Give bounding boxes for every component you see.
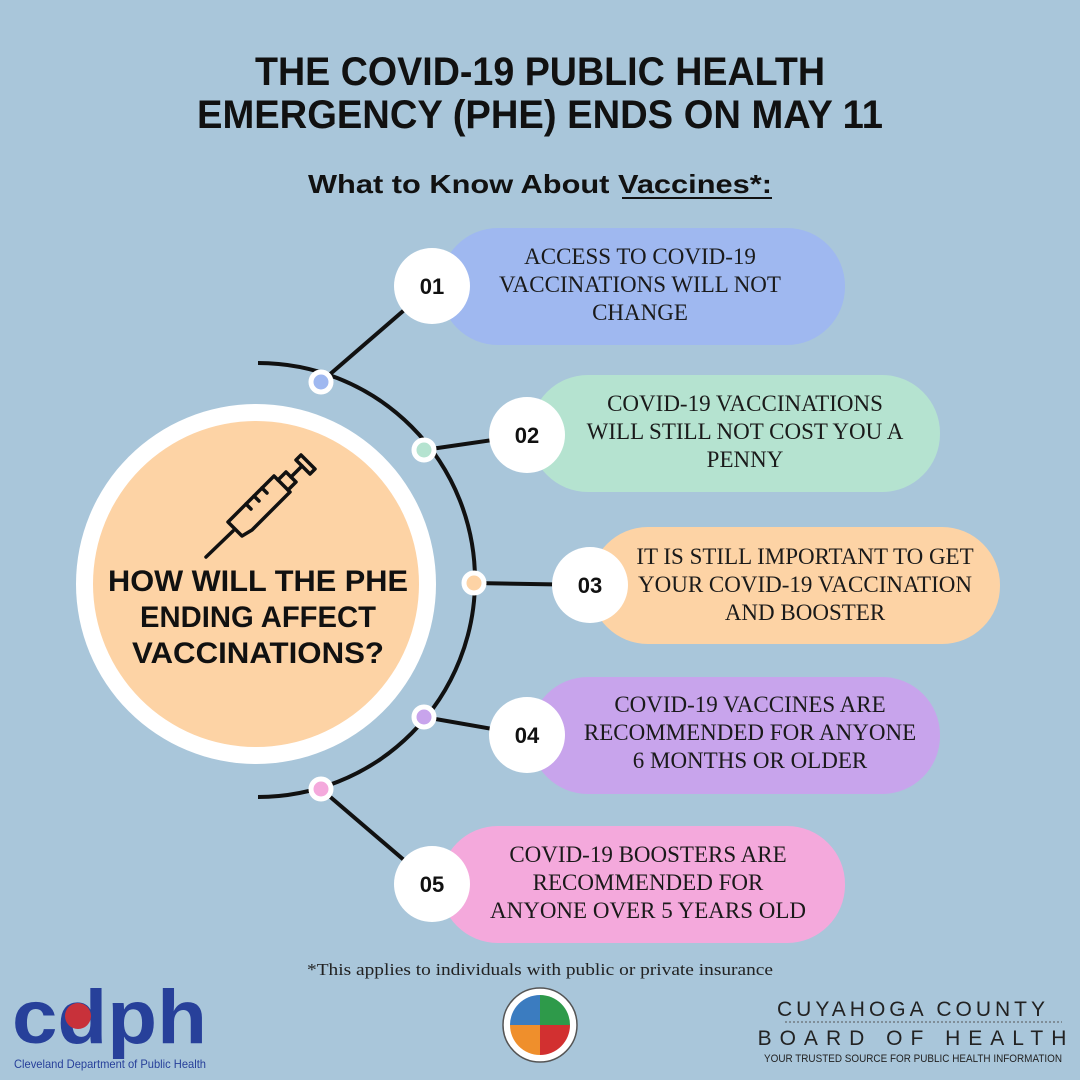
item 03: [552, 527, 1000, 644]
item 05: 05: [420, 872, 444, 897]
item 03: AND BOOSTER: [725, 600, 886, 625]
item 05: RECOMMENDED FOR: [533, 870, 764, 895]
logo: Cuyahoga County Board of Health: BOARD OF HEALTH: [758, 1027, 1074, 1050]
title: THE COVID-19 PUBLIC HEALTH: [255, 50, 825, 94]
central question: ENDING AFFECT: [140, 601, 376, 634]
logo: cdph: cdph: [12, 975, 207, 1060]
item 05: ANYONE OVER 5 YEARS OLD: [490, 898, 806, 923]
item 02: PENNY: [707, 447, 784, 472]
item 04: 04: [515, 723, 540, 748]
connector dots: [311, 372, 484, 799]
item 03: YOUR COVID-19 VACCINATION: [638, 572, 972, 597]
central circle: [76, 404, 436, 764]
item 03: 03: [578, 573, 602, 598]
item 02: COVID-19 VACCINATIONS: [607, 391, 883, 416]
item 01: [394, 228, 845, 345]
item 01: CHANGE: [592, 300, 688, 325]
icon: syringe: [206, 455, 315, 557]
item 04: [489, 677, 940, 794]
subtitle: What to Know About Vaccines*:: [308, 169, 772, 199]
item 02: WILL STILL NOT COST YOU A: [587, 419, 904, 444]
footnote: *This applies to individuals with public or private insurance: [307, 960, 773, 979]
item 05: COVID-19 BOOSTERS ARE: [509, 842, 787, 867]
item 04: COVID-19 VACCINES ARE: [614, 692, 886, 717]
arc connector: [258, 286, 590, 884]
item 02: 02: [515, 423, 539, 448]
item 01: VACCINATIONS WILL NOT: [499, 272, 781, 297]
item 04: RECOMMENDED FOR ANYONE: [584, 720, 916, 745]
logo: Cuyahoga County Board of Health: [758, 998, 1074, 1065]
central question: [108, 565, 408, 670]
item 02: [489, 375, 940, 492]
item 05: [394, 826, 845, 943]
central question: VACCINATIONS?: [132, 637, 384, 670]
logo: county seal: [503, 988, 577, 1062]
item 04: 6 MONTHS OR OLDER: [633, 748, 868, 773]
title: [197, 50, 883, 137]
item 03: IT IS STILL IMPORTANT TO GET: [636, 544, 974, 569]
title: EMERGENCY (PHE) ENDS ON MAY 11: [197, 93, 883, 137]
logo: cdph: Cleveland Department of Public Health: [14, 1057, 206, 1071]
logo: Cuyahoga County Board of Health: CUYAHOGA COUNTY: [777, 998, 1049, 1021]
central question: HOW WILL THE PHE: [108, 565, 408, 598]
item 01: ACCESS TO COVID-19: [524, 244, 756, 269]
item 01: 01: [420, 274, 444, 299]
